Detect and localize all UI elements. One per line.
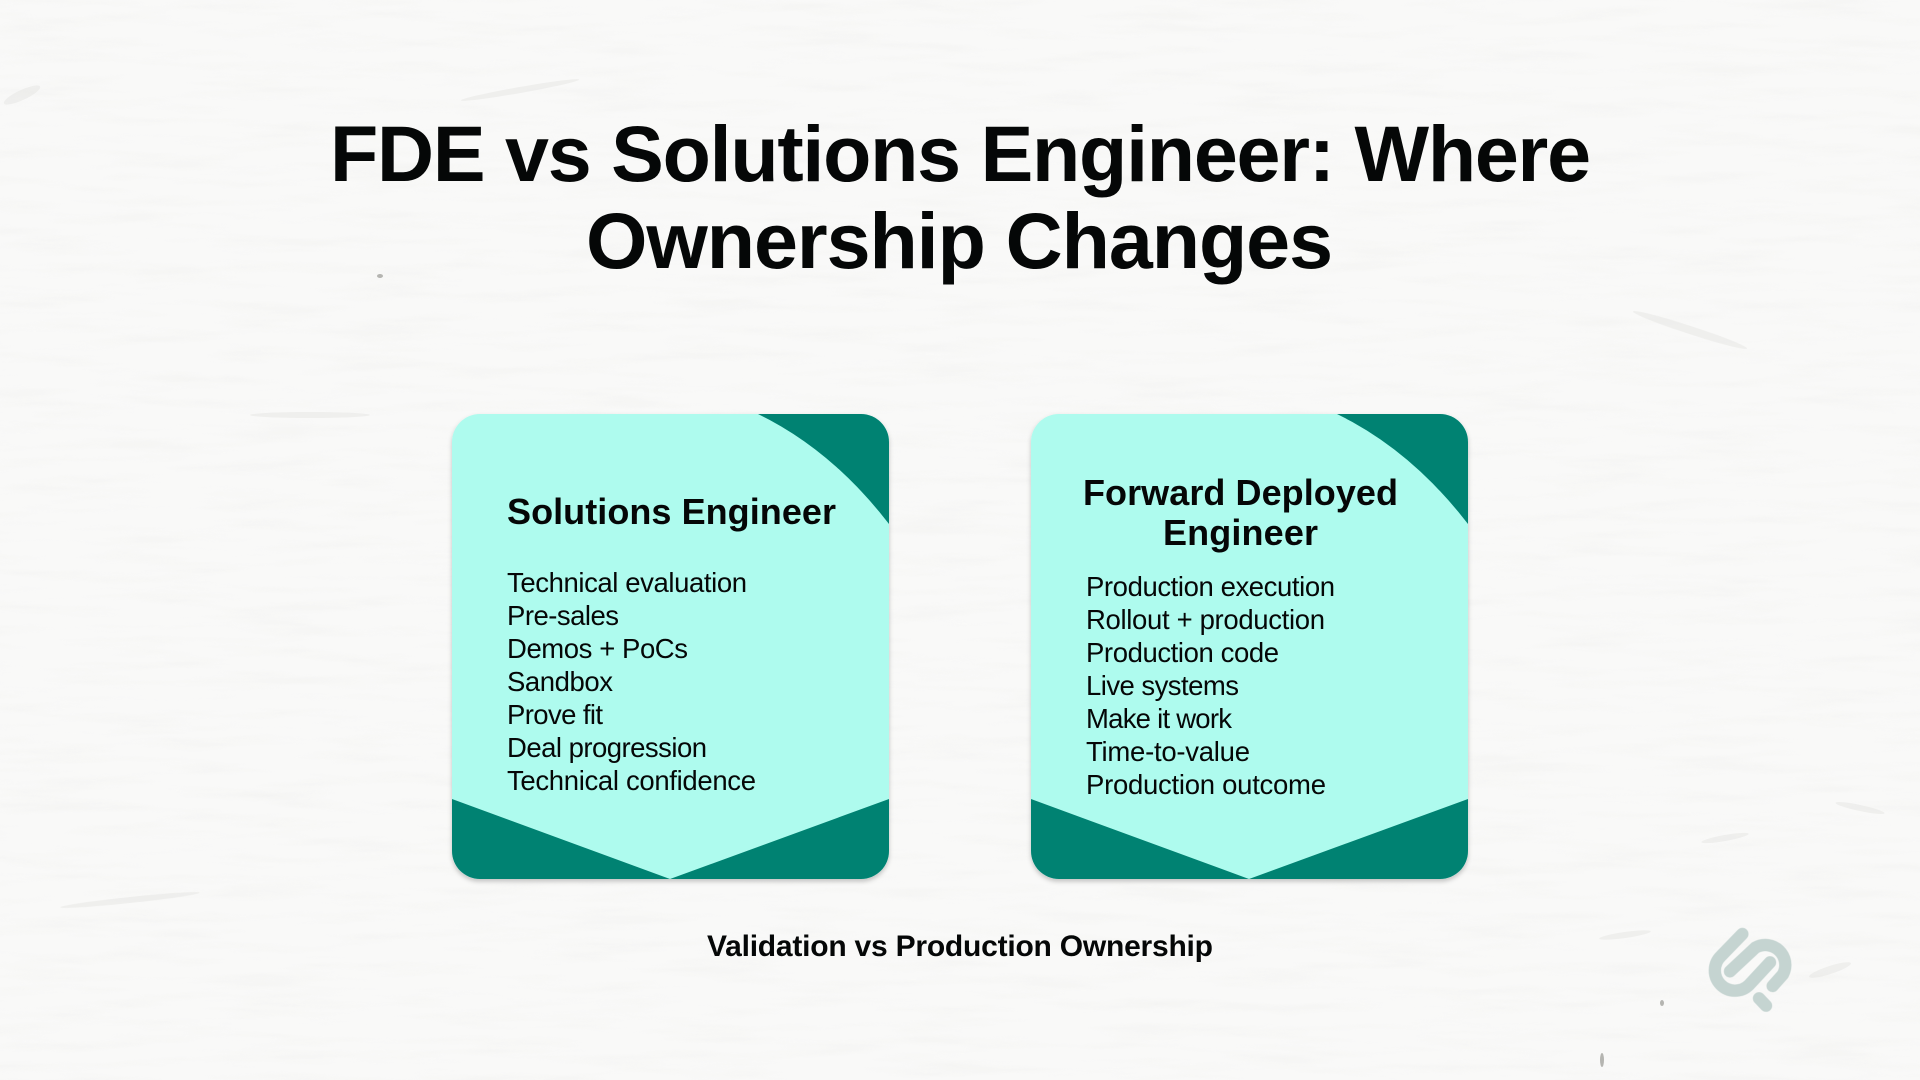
list: forward deployed engineer responsibilities: Time-to-value xyxy=(1086,736,1250,767)
caption: Validation vs Production Ownership xyxy=(707,930,1213,963)
title: FDE vs Solutions Engineer: Where xyxy=(330,109,1591,198)
card shape: forward deployed engineer xyxy=(1031,414,1468,879)
list: forward deployed engineer responsibilities: Make it work xyxy=(1086,703,1232,734)
list: forward deployed engineer responsibilities: Production execution xyxy=(1086,571,1335,602)
list: forward deployed engineer responsibilities: Production code xyxy=(1086,637,1279,668)
title xyxy=(330,109,1591,285)
list: forward deployed engineer responsibilities: Live systems xyxy=(1086,670,1239,701)
heading: forward deployed engineer: Engineer xyxy=(1163,512,1318,553)
list: forward deployed engineer responsibilities: Rollout + production xyxy=(1086,604,1325,635)
list: forward deployed engineer responsibilities xyxy=(1086,571,1335,800)
heading: forward deployed engineer xyxy=(1083,472,1398,553)
list: solutions engineer responsibilities: Sandbox xyxy=(507,666,613,697)
list: solutions engineer responsibilities: Deal progression xyxy=(507,732,707,763)
card shape: solutions engineer xyxy=(452,414,889,879)
list: solutions engineer responsibilities: Pre-sales xyxy=(507,600,619,631)
list: solutions engineer responsibilities: Technical confidence xyxy=(507,765,756,796)
icon: logo xyxy=(1715,934,1785,1006)
list: solutions engineer responsibilities: Prove fit xyxy=(507,699,603,730)
title: Ownership Changes xyxy=(586,196,1333,285)
heading: forward deployed engineer: Forward Deployed xyxy=(1083,472,1398,513)
panel: forward deployed engineer xyxy=(1031,414,1468,879)
panel: solutions engineer xyxy=(452,414,889,879)
list: solutions engineer responsibilities: Demos + PoCs xyxy=(507,633,688,664)
list: forward deployed engineer responsibilities: Production outcome xyxy=(1086,769,1326,800)
list: solutions engineer responsibilities: Technical evaluation xyxy=(507,567,747,598)
list: solutions engineer responsibilities xyxy=(507,567,756,796)
heading: solutions engineer: Solutions Engineer xyxy=(507,491,836,532)
